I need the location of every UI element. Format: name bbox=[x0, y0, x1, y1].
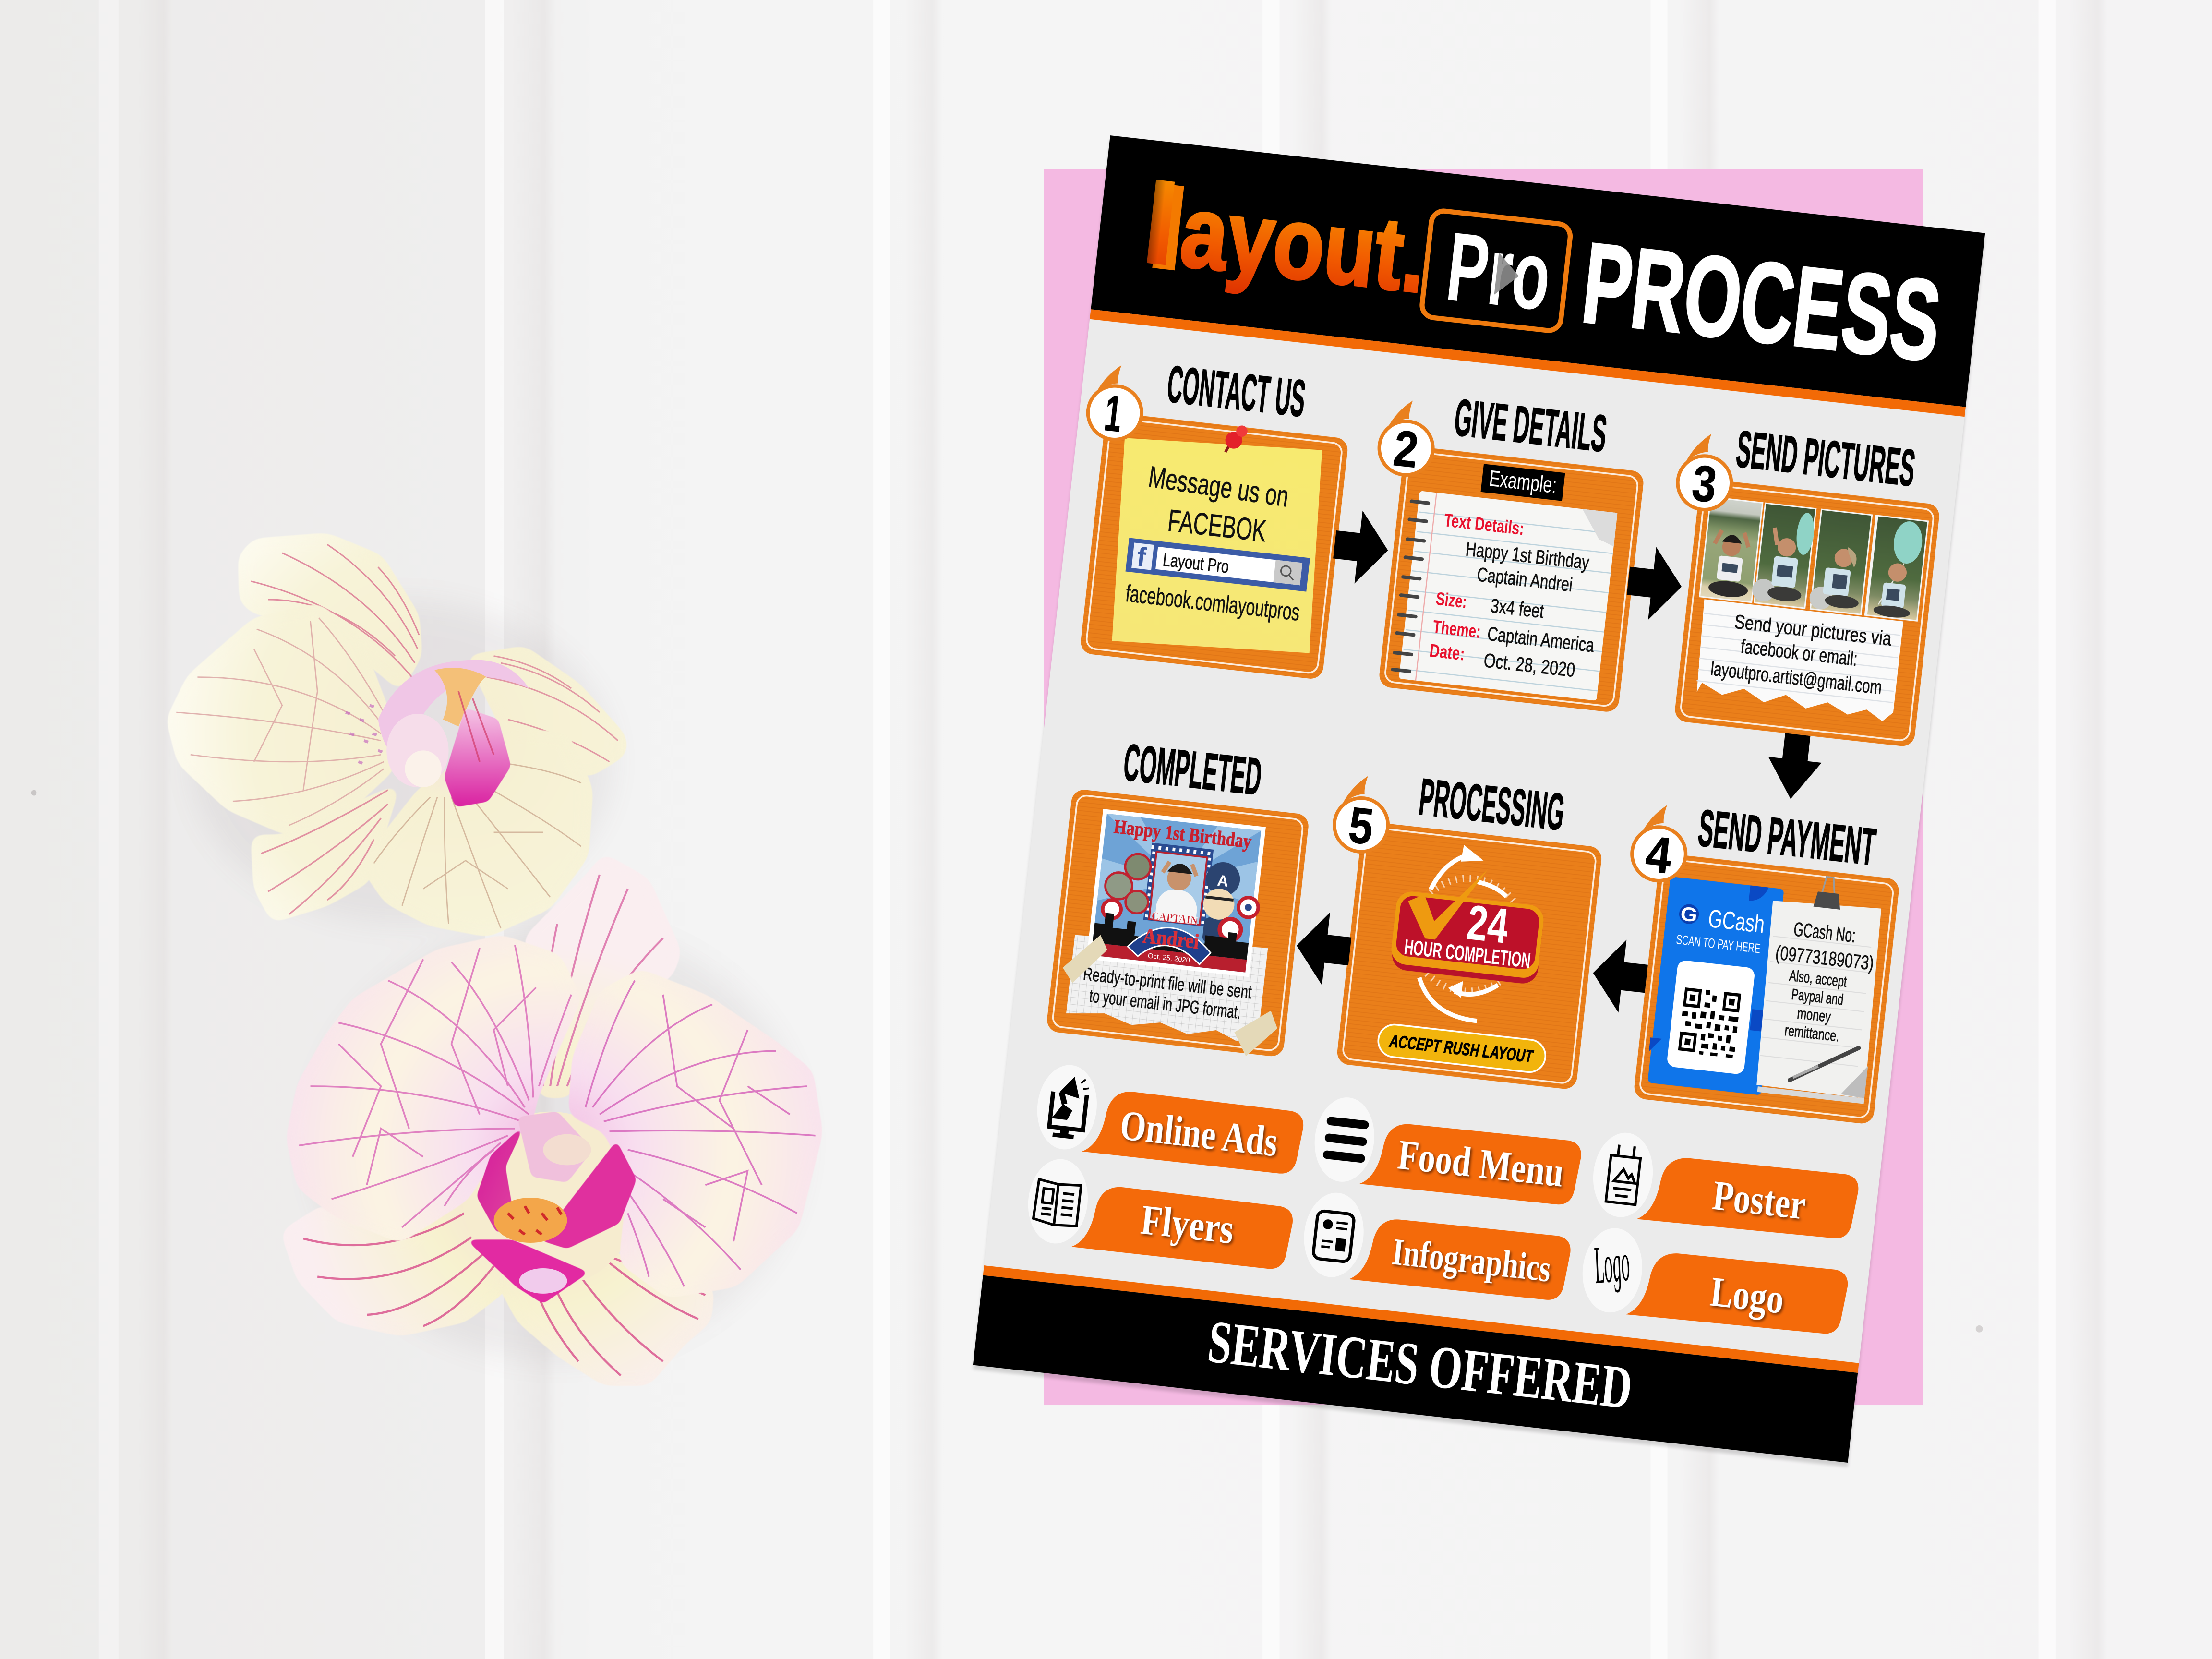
service: logo: Logo bbox=[1591, 1233, 1632, 1295]
birthday tarpaulin sample bbox=[1086, 809, 1267, 977]
icon: pen bbox=[1790, 1041, 1859, 1087]
service: poster: Poster bbox=[1710, 1172, 1808, 1229]
lip and column bbox=[467, 1112, 636, 1303]
arrow: step 4 to 5 bbox=[1589, 937, 1650, 1015]
centre filler bbox=[463, 1112, 637, 1286]
red banner: 24 bbox=[1465, 894, 1511, 954]
badge 1: 1 bbox=[1102, 385, 1125, 443]
logo: layout.: l bbox=[1134, 158, 1187, 291]
lip bbox=[378, 660, 529, 807]
gcash details paper: remittance. bbox=[1784, 1022, 1840, 1045]
petal: left petal bbox=[287, 935, 581, 1243]
service: food menu bbox=[1310, 1094, 1585, 1208]
icon: infographic card bbox=[1313, 1211, 1355, 1262]
notebook page: Theme: bbox=[1432, 616, 1482, 642]
logo: Pro box: Pro bbox=[1442, 211, 1556, 331]
gcash card bbox=[1646, 876, 1784, 1095]
facebook search bar bbox=[1125, 538, 1310, 592]
badge 5 bbox=[1331, 773, 1393, 857]
petal: lower-left sepal bbox=[281, 1155, 508, 1336]
red banner: HOUR COMPLETION bbox=[1403, 935, 1532, 973]
footer band bbox=[973, 1265, 1859, 1463]
badge 5: 5 bbox=[1346, 796, 1376, 855]
panel: step 4 send payment: SEND PAYMENT bbox=[1695, 799, 1878, 877]
petal: right sepal bbox=[466, 646, 626, 777]
torn note paper: Send your pictures via bbox=[1733, 611, 1893, 650]
icon circle bbox=[1310, 1094, 1379, 1185]
birthday banner text: Happy 1st Birthday bbox=[1113, 815, 1253, 853]
service: infographics bbox=[1300, 1190, 1574, 1303]
petal: lower-right sepal bbox=[494, 1241, 714, 1385]
name arch: Oct. 25, 2020 bbox=[1147, 952, 1190, 964]
icon circle bbox=[1589, 1130, 1657, 1220]
poster shadow bbox=[973, 140, 1985, 1467]
gcash card: SCAN TO PAY HERE bbox=[1675, 932, 1761, 956]
footer title: services offered: SERVICES OFFERED bbox=[1205, 1308, 1635, 1422]
petal: right petal bbox=[568, 969, 822, 1298]
star frame and child: CAPTAIN bbox=[1151, 910, 1199, 927]
red banner bbox=[1389, 859, 1549, 985]
logo: Pro box bbox=[1421, 209, 1572, 333]
header band bbox=[1090, 135, 1985, 417]
icon circle bbox=[1578, 1225, 1647, 1316]
grid note paper bbox=[1065, 926, 1268, 1043]
photo 3 bbox=[1808, 510, 1871, 614]
sticky note bbox=[1102, 428, 1332, 663]
service: online ads: Online Ads bbox=[1118, 1101, 1280, 1166]
tape strips bbox=[1055, 931, 1286, 1059]
torn note paper bbox=[1693, 599, 1903, 722]
service: online ads bbox=[1033, 1062, 1307, 1176]
icon: menu bars bbox=[1327, 1121, 1365, 1158]
icon: open book bbox=[1033, 1179, 1081, 1227]
notebook page: 3x4 feet bbox=[1490, 595, 1545, 623]
grid note paper: Ready-to-print file will be sent bbox=[1082, 963, 1253, 1003]
torn note paper: layoutpro.artist@gmail.com bbox=[1709, 658, 1883, 698]
chibi captain bbox=[1199, 860, 1263, 948]
petal: dorsal sepal bbox=[239, 533, 422, 691]
icon circle bbox=[1300, 1190, 1368, 1280]
panel: step 5 processing: PROCESSING bbox=[1417, 768, 1567, 842]
badge 2: 2 bbox=[1391, 420, 1421, 479]
panel: step 1 contact us: CONTACT US bbox=[1165, 355, 1308, 428]
panel: step 6 completed bbox=[1046, 728, 1316, 1060]
petal: lower-left sepal bbox=[251, 783, 401, 923]
qr code bbox=[1678, 987, 1741, 1058]
panel: step 4 send payment bbox=[1605, 792, 1907, 1125]
gcash details paper: (09773189073) bbox=[1774, 941, 1875, 974]
panel: step 1 contact us bbox=[1061, 347, 1356, 680]
icon: poster sheet bbox=[1606, 1144, 1642, 1205]
panel: step 3 send pictures: SEND PICTURES bbox=[1733, 420, 1918, 498]
icon circle bbox=[1024, 1156, 1092, 1247]
gcash card: GCash bbox=[1707, 904, 1766, 939]
poster body bbox=[973, 135, 1985, 1463]
poster: Layout.Pro process bbox=[973, 135, 1985, 1463]
photo 4 bbox=[1867, 517, 1927, 620]
gcash details paper bbox=[1752, 871, 1888, 1104]
title: PROCESS: PROCESS bbox=[1576, 219, 1947, 385]
notebook page: Oct. 28, 2020 bbox=[1483, 649, 1576, 681]
gcash details paper: Also, accept bbox=[1789, 967, 1848, 990]
badge 3: 3 bbox=[1689, 455, 1719, 513]
photo 2 bbox=[1751, 504, 1816, 608]
arrow: step 5 to 6 bbox=[1293, 909, 1354, 988]
panel: step 2 give details bbox=[1353, 381, 1652, 713]
arrow: step 3 to 4 bbox=[1764, 732, 1825, 802]
chibi captain: A bbox=[1216, 872, 1229, 890]
notebook page: Text Details: bbox=[1443, 510, 1525, 539]
badge 4 bbox=[1629, 802, 1691, 886]
facebook search bar: f bbox=[1135, 541, 1148, 572]
service: food menu: Food Menu bbox=[1395, 1131, 1566, 1196]
panel: step 6 completed: COMPLETED bbox=[1121, 733, 1264, 806]
panel: step 3 send pictures bbox=[1651, 414, 1948, 747]
badge 2 bbox=[1376, 397, 1438, 480]
star frame and child bbox=[1143, 843, 1214, 928]
icon: gcash mark: G bbox=[1679, 902, 1699, 926]
example tag: Example: bbox=[1488, 465, 1558, 498]
sticky note: Message us on bbox=[1146, 460, 1291, 514]
grid note paper: to your email in JPG format. bbox=[1088, 986, 1242, 1023]
icon: monitor with megaphone bbox=[1048, 1075, 1090, 1140]
flower: upper cream orchid bbox=[167, 533, 626, 937]
gcash details paper: money bbox=[1796, 1005, 1832, 1025]
notebook page: Happy 1st Birthday bbox=[1465, 538, 1590, 574]
panel: step 2 give details: GIVE DETAILS bbox=[1452, 389, 1610, 463]
logo: layout.: ayout. bbox=[1176, 173, 1432, 314]
orchid shadows bbox=[191, 600, 804, 1361]
arrow: step 1 to 2 bbox=[1331, 508, 1392, 587]
panel: step 5 processing bbox=[1308, 759, 1610, 1090]
photo 1 bbox=[1700, 498, 1762, 601]
notebook page: Captain America bbox=[1486, 623, 1595, 656]
service: flyers: Flyers bbox=[1139, 1196, 1236, 1253]
arrow: step 2 to 3 bbox=[1624, 544, 1686, 623]
icon circle bbox=[1033, 1062, 1101, 1153]
facebook search bar: Layout Pro bbox=[1162, 550, 1230, 577]
pink backing card bbox=[1044, 169, 1923, 1405]
gcash details paper: GCash No: bbox=[1792, 918, 1857, 947]
notebook page: Date: bbox=[1429, 640, 1466, 665]
service: poster bbox=[1589, 1130, 1862, 1243]
pill: accept rush layout: ACCEPT RUSH LAYOUT bbox=[1388, 1031, 1535, 1067]
badge 3 bbox=[1675, 431, 1737, 515]
pill: accept rush layout bbox=[1377, 1023, 1547, 1074]
notebook page bbox=[1392, 490, 1617, 701]
name arch bbox=[1126, 922, 1213, 967]
gcash details paper: Paypal and bbox=[1791, 986, 1844, 1009]
photo circles and shield left bbox=[1102, 851, 1154, 922]
flower: lower pink orchid bbox=[281, 854, 822, 1385]
icon: circular arrows bbox=[1403, 840, 1534, 1025]
sticky note: facebook.comlayoutpros bbox=[1124, 580, 1301, 626]
petal: dorsal sepal bbox=[525, 854, 681, 1097]
notebook page: Size: bbox=[1435, 589, 1468, 613]
badge 1 bbox=[1085, 362, 1147, 445]
logo: layout. bbox=[1132, 158, 1433, 319]
notebook page: Captain Andrei bbox=[1476, 563, 1574, 596]
service: logo: Logo bbox=[1708, 1268, 1786, 1323]
torn note paper: facebook or email: bbox=[1740, 635, 1859, 670]
icon: binder clip bbox=[1814, 876, 1843, 910]
petal: left petal bbox=[167, 604, 395, 835]
icon: red push pin bbox=[1224, 424, 1248, 454]
service: logo bbox=[1578, 1225, 1851, 1338]
petal: right petal bbox=[361, 728, 592, 937]
badge 4: 4 bbox=[1643, 825, 1674, 885]
sticky note: FACEBOK bbox=[1166, 503, 1268, 548]
photo strip bbox=[1699, 496, 1929, 622]
service: flyers bbox=[1023, 1156, 1297, 1271]
name arch: Andrei bbox=[1142, 924, 1201, 953]
service: infographics: Infographics bbox=[1390, 1231, 1553, 1290]
